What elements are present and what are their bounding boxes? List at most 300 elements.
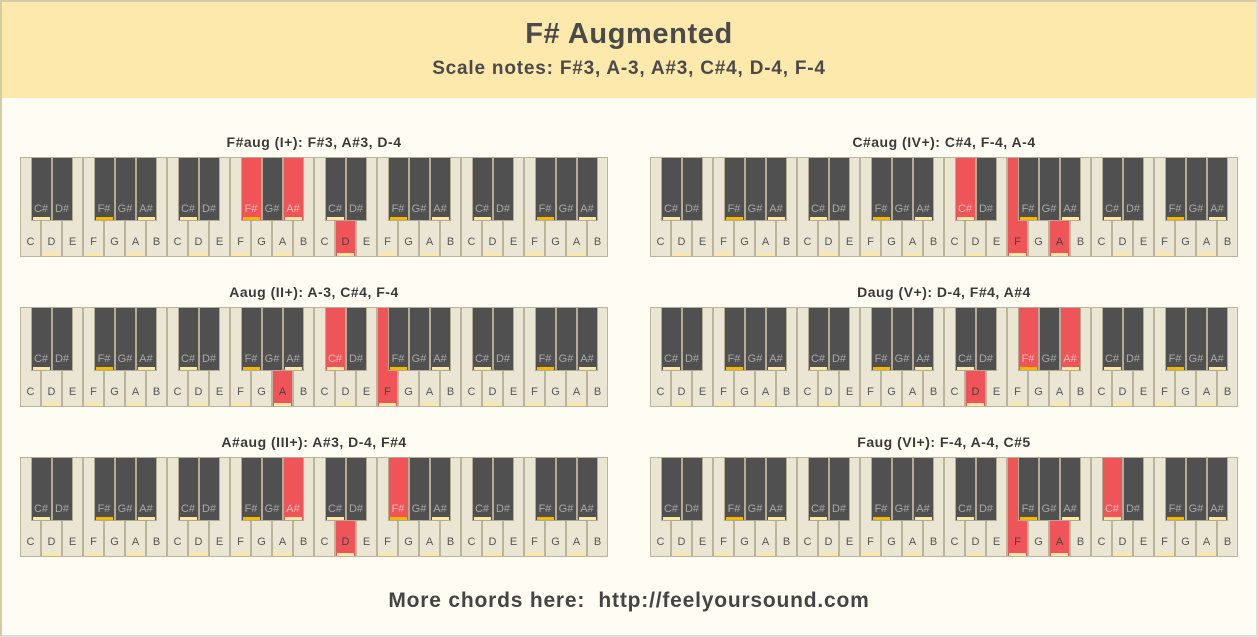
keyboard: Daug: D — [825, 386, 832, 398]
keyboard: C#aug: G — [740, 236, 749, 248]
keyboard: Aaug: G — [404, 386, 413, 398]
keyboard: Aaug: F — [237, 386, 244, 398]
keyboard: Faug: D# — [1126, 503, 1140, 515]
keyboard: Aaug: C — [321, 386, 328, 398]
keyboard: F#aug: F — [384, 236, 391, 248]
keyboard: Aaug: F# — [539, 353, 551, 365]
keyboard: F#aug: D# — [202, 203, 216, 215]
keyboard: C#aug: D# — [832, 203, 846, 215]
keyboard: F#aug: C# — [34, 203, 48, 215]
keyboard: Aaug: D# — [349, 353, 363, 365]
keyboard: Aaug: F# — [245, 353, 257, 365]
keyboard: C#aug: B — [1077, 236, 1084, 248]
chord title: F#aug: F#aug (I+): F#3, A#3, D-4 — [227, 134, 401, 150]
keyboard: F#aug: E — [216, 236, 223, 248]
keyboard: Daug: A — [1203, 386, 1210, 398]
keyboard: C#aug: C — [951, 236, 958, 248]
keyboard: Daug: G# — [1189, 353, 1203, 365]
keyboard: C#aug: A# — [1210, 203, 1224, 215]
keyboard: A#aug: A — [279, 536, 286, 548]
keyboard: A#aug: B — [153, 536, 160, 548]
keyboard: Daug: A# — [1210, 353, 1224, 365]
keyboard: A#aug: A# — [433, 503, 447, 515]
keyboard: C#aug: E — [1140, 236, 1147, 248]
keyboard: A#aug: A# — [580, 503, 594, 515]
keyboard: Aaug: D# — [496, 353, 510, 365]
keyboard: A#aug: G# — [559, 503, 573, 515]
keyboard: C#aug: A — [909, 236, 916, 248]
keyboard: F#aug: C — [321, 236, 328, 248]
keyboard: A#aug: C — [27, 536, 34, 548]
keyboard: Aaug: G# — [412, 353, 426, 365]
keyboard: Aaug: G# — [118, 353, 132, 365]
keyboard: F#aug: G — [404, 236, 413, 248]
keyboard: C#aug: F — [1161, 236, 1168, 248]
keyboard: C#aug: G# — [748, 203, 762, 215]
keyboard: F#aug: C — [27, 236, 34, 248]
keyboard: A#aug: E — [510, 536, 517, 548]
keyboard: Daug: G — [1034, 386, 1043, 398]
keyboard: F#aug: F — [90, 236, 97, 248]
keyboard: A#aug: G# — [412, 503, 426, 515]
keyboard: F#aug: F# — [392, 203, 404, 215]
keyboard: Faug: F# — [728, 503, 740, 515]
keyboard: A#aug: A# — [139, 503, 153, 515]
keyboard: Daug: F# — [1022, 353, 1034, 365]
keyboard: F#aug: D — [342, 236, 349, 248]
keyboard: C#aug: F — [867, 236, 874, 248]
keyboard: A#aug: E — [363, 536, 370, 548]
keyboard: Faug: F# — [1169, 503, 1181, 515]
keyboard: Faug: A — [1056, 536, 1063, 548]
keyboard: Faug: B — [1224, 536, 1231, 548]
keyboard: Aaug — [20, 307, 608, 407]
keyboard: Faug: A# — [1063, 503, 1077, 515]
keyboard: A#aug: B — [594, 536, 601, 548]
keyboard: Faug: G — [1181, 536, 1190, 548]
keyboard: Faug: F — [867, 536, 874, 548]
keyboard: Daug: C# — [1105, 353, 1119, 365]
keyboard: A#aug: E — [216, 536, 223, 548]
keyboard: A#aug — [20, 457, 608, 557]
keyboard: Daug: F# — [1169, 353, 1181, 365]
keyboard: Daug: C# — [958, 353, 972, 365]
keyboard: Aaug: C# — [328, 353, 342, 365]
keyboard: C#aug: C — [804, 236, 811, 248]
keyboard: A#aug: G# — [265, 503, 279, 515]
keyboard: A#aug: F# — [539, 503, 551, 515]
keyboard: Aaug: E — [216, 386, 223, 398]
keyboard: Faug: B — [1077, 536, 1084, 548]
keyboard: A#aug: D — [48, 536, 55, 548]
keyboard: A#aug: F# — [245, 503, 257, 515]
keyboard: Aaug: A# — [580, 353, 594, 365]
keyboard: F#aug: A# — [286, 203, 300, 215]
keyboard: Aaug: F# — [98, 353, 110, 365]
keyboard: Aaug: A — [426, 386, 433, 398]
keyboard: C#aug: F — [1014, 236, 1021, 248]
keyboard: A#aug: C — [174, 536, 181, 548]
keyboard: Faug: F# — [875, 503, 887, 515]
keyboard: C#aug: C# — [1105, 203, 1119, 215]
keyboard: Faug: C# — [811, 503, 825, 515]
keyboard: Aaug: B — [300, 386, 307, 398]
keyboard: C#aug: A — [762, 236, 769, 248]
keyboard: F#aug: G — [110, 236, 119, 248]
keyboard: Daug: C — [951, 386, 958, 398]
keyboard: Aaug: C# — [181, 353, 195, 365]
keyboard: Faug: E — [846, 536, 853, 548]
keyboard: Faug — [650, 457, 1238, 557]
keyboard: Aaug: D# — [202, 353, 216, 365]
keyboard: Daug: F — [720, 386, 727, 398]
keyboard: Aaug: C# — [34, 353, 48, 365]
keyboard: Faug: D — [972, 536, 979, 548]
keyboard: C#aug: A — [1203, 236, 1210, 248]
keyboard: F#aug: D# — [349, 203, 363, 215]
keyboard: A#aug: G — [404, 536, 413, 548]
keyboard: Aaug: E — [363, 386, 370, 398]
keyboard: A#aug: G — [257, 536, 266, 548]
keyboard: F#aug: G# — [412, 203, 426, 215]
keyboard: Daug: A# — [1063, 353, 1077, 365]
keyboard: Aaug: D# — [55, 353, 69, 365]
keyboard: A#aug: E — [69, 536, 76, 548]
keyboard: Aaug: B — [594, 386, 601, 398]
keyboard: F#aug: A — [279, 236, 286, 248]
keyboard: Daug: A# — [916, 353, 930, 365]
keyboard: A#aug: F — [531, 536, 538, 548]
keyboard: C#aug: C# — [958, 203, 972, 215]
keyboard: Faug: G# — [1189, 503, 1203, 515]
keyboard: Faug: D# — [685, 503, 699, 515]
keyboard: Faug: G# — [895, 503, 909, 515]
keyboard: A#aug: C — [468, 536, 475, 548]
keyboard: Faug: C — [1098, 536, 1105, 548]
keyboard: C#aug: D# — [1126, 203, 1140, 215]
keyboard: A#aug: A# — [286, 503, 300, 515]
keyboard: Faug: C# — [664, 503, 678, 515]
keyboard: Daug: D# — [979, 353, 993, 365]
keyboard: C#aug: G# — [1042, 203, 1056, 215]
keyboard: C#aug: E — [699, 236, 706, 248]
keyboard: Daug: G# — [895, 353, 909, 365]
keyboard: Aaug: F — [531, 386, 538, 398]
keyboard: A#aug: C — [321, 536, 328, 548]
keyboard: F#aug: B — [300, 236, 307, 248]
keyboard: Faug: G — [740, 536, 749, 548]
footer link text: More chords here: http://feelyoursound.com — [388, 589, 870, 612]
keyboard: F#aug: B — [153, 236, 160, 248]
keyboard: F#aug: B — [447, 236, 454, 248]
keyboard: C#aug: G — [1034, 236, 1043, 248]
keyboard: Faug: D — [825, 536, 832, 548]
keyboard: C#aug: A — [1056, 236, 1063, 248]
keyboard: F#aug: A# — [433, 203, 447, 215]
keyboard: Faug: A# — [769, 503, 783, 515]
keyboard: Aaug: B — [153, 386, 160, 398]
keyboard: Faug: E — [993, 536, 1000, 548]
keyboard: Daug: C — [804, 386, 811, 398]
keyboard: Faug: C — [951, 536, 958, 548]
keyboard: A#aug: D# — [496, 503, 510, 515]
keyboard: F#aug: A — [132, 236, 139, 248]
keyboard: Daug: A# — [769, 353, 783, 365]
keyboard: Faug: B — [930, 536, 937, 548]
keyboard: F#aug: C# — [181, 203, 195, 215]
keyboard: F#aug: D — [195, 236, 202, 248]
keyboard: Faug: D# — [832, 503, 846, 515]
keyboard: F#aug: D — [48, 236, 55, 248]
keyboard: Aaug: A — [279, 386, 286, 398]
keyboard: Aaug: G# — [559, 353, 573, 365]
keyboard: F#aug: D# — [55, 203, 69, 215]
keyboard: Aaug: G — [551, 386, 560, 398]
keyboard: Faug: G — [1034, 536, 1043, 548]
keyboard: Aaug: A — [132, 386, 139, 398]
keyboard: Faug: D — [1119, 536, 1126, 548]
keyboard: Daug: C# — [664, 353, 678, 365]
keyboard: A#aug: G — [551, 536, 560, 548]
keyboard: Daug: D — [972, 386, 979, 398]
keyboard: Aaug: D — [195, 386, 202, 398]
keyboard: F#aug: E — [69, 236, 76, 248]
keyboard: Daug: E — [1140, 386, 1147, 398]
keyboard: C#aug: G# — [895, 203, 909, 215]
subtitle: scale notes: Scale notes: F#3, A-3, A#3, C#4, D-4, F-4 — [432, 58, 826, 79]
keyboard: A#aug: A — [132, 536, 139, 548]
keyboard: Daug: B — [783, 386, 790, 398]
keyboard: F#aug: F — [531, 236, 538, 248]
keyboard: Faug: G — [887, 536, 896, 548]
chord title: C#aug: C#aug (IV+): C#4, F-4, A-4 — [852, 134, 1036, 150]
keyboard: Aaug: G — [257, 386, 266, 398]
keyboard: F#aug: G — [551, 236, 560, 248]
keyboard: Daug: F — [867, 386, 874, 398]
keyboard: Faug: B — [783, 536, 790, 548]
keyboard: Daug: G# — [748, 353, 762, 365]
keyboard: C#aug: A# — [916, 203, 930, 215]
keyboard: C#aug: C — [1098, 236, 1105, 248]
keyboard: F#aug: B — [594, 236, 601, 248]
keyboard: Daug: F — [1161, 386, 1168, 398]
keyboard: Faug: A# — [916, 503, 930, 515]
keyboard: Aaug: F — [384, 386, 391, 398]
keyboard: F#aug: A# — [580, 203, 594, 215]
keyboard: Daug: E — [993, 386, 1000, 398]
keyboard: Daug: B — [1077, 386, 1084, 398]
keyboard: C#aug: B — [783, 236, 790, 248]
keyboard: Faug: E — [1140, 536, 1147, 548]
keyboard: Faug: C — [804, 536, 811, 548]
keyboard: Daug: F — [1014, 386, 1021, 398]
keyboard: F#aug: F# — [539, 203, 551, 215]
keyboard: C#aug: E — [993, 236, 1000, 248]
keyboard: C#aug: D — [825, 236, 832, 248]
keyboard: Aaug: A# — [433, 353, 447, 365]
keyboard: Daug: B — [1224, 386, 1231, 398]
keyboard: Faug: A# — [1210, 503, 1224, 515]
header — [2, 2, 1256, 98]
keyboard: F#aug: F# — [98, 203, 110, 215]
keyboard: A#aug: F — [237, 536, 244, 548]
keyboard: C#aug: G — [1181, 236, 1190, 248]
keyboard: C#aug: D — [1119, 236, 1126, 248]
keyboard: C#aug: F# — [1022, 203, 1034, 215]
keyboard: F#aug: E — [510, 236, 517, 248]
keyboard: F#aug: C# — [328, 203, 342, 215]
keyboard: Daug: A — [1056, 386, 1063, 398]
keyboard: F#aug: C — [174, 236, 181, 248]
keyboard: Daug: D# — [685, 353, 699, 365]
keyboard: Daug: A — [909, 386, 916, 398]
keyboard: Aaug: C — [468, 386, 475, 398]
keyboard: F#aug: A — [573, 236, 580, 248]
keyboard: Aaug: E — [69, 386, 76, 398]
keyboard: A#aug: G — [110, 536, 119, 548]
keyboard: Aaug: D — [48, 386, 55, 398]
keyboard: C#aug: F — [720, 236, 727, 248]
keyboard: Aaug: C — [174, 386, 181, 398]
keyboard: C#aug: G — [887, 236, 896, 248]
keyboard: F#aug: A — [426, 236, 433, 248]
keyboard: Daug: G# — [1042, 353, 1056, 365]
keyboard: Faug: F — [1161, 536, 1168, 548]
keyboard: F#aug: D# — [496, 203, 510, 215]
keyboard: Faug: F — [1014, 536, 1021, 548]
keyboard: F#aug: G — [257, 236, 266, 248]
keyboard: A#aug: F — [384, 536, 391, 548]
keyboard: Daug — [650, 307, 1238, 407]
keyboard: Aaug: F — [90, 386, 97, 398]
keyboard: A#aug: A — [426, 536, 433, 548]
keyboard: Aaug: C# — [475, 353, 489, 365]
keyboard: A#aug: C# — [328, 503, 342, 515]
keyboard: Faug: F — [720, 536, 727, 548]
keyboard: Faug: A — [1203, 536, 1210, 548]
keyboard: Daug: C# — [811, 353, 825, 365]
keyboard: Daug: D — [678, 386, 685, 398]
keyboard: Faug: F# — [1022, 503, 1034, 515]
keyboard: Daug: B — [930, 386, 937, 398]
keyboard: F#aug: G# — [118, 203, 132, 215]
keyboard: A#aug: A — [573, 536, 580, 548]
keyboard: C#aug: A# — [769, 203, 783, 215]
keyboard: A#aug: D — [489, 536, 496, 548]
keyboard: A#aug: F# — [98, 503, 110, 515]
keyboard: Aaug: C — [27, 386, 34, 398]
keyboard: Daug: G — [1181, 386, 1190, 398]
keyboard: Daug: D# — [1126, 353, 1140, 365]
keyboard: A#aug: F# — [392, 503, 404, 515]
keyboard: Aaug: D — [342, 386, 349, 398]
title: F# Augmented — [525, 18, 733, 50]
keyboard: F#aug: F — [237, 236, 244, 248]
keyboard: Daug: F# — [875, 353, 887, 365]
keyboard: F#aug — [20, 157, 608, 257]
keyboard: Daug: D# — [832, 353, 846, 365]
keyboard: C#aug: A# — [1063, 203, 1077, 215]
keyboard: Daug: E — [846, 386, 853, 398]
keyboard: Faug: C# — [958, 503, 972, 515]
keyboard: Aaug: G — [110, 386, 119, 398]
keyboard: Aaug: D — [489, 386, 496, 398]
keyboard: A#aug: C# — [34, 503, 48, 515]
keyboard: Faug: D# — [979, 503, 993, 515]
keyboard: A#aug: D — [342, 536, 349, 548]
keyboard: C#aug: B — [1224, 236, 1231, 248]
keyboard: C#aug: E — [846, 236, 853, 248]
keyboard: Aaug: A# — [286, 353, 300, 365]
keyboard: A#aug: D# — [202, 503, 216, 515]
keyboard: A#aug: B — [300, 536, 307, 548]
keyboard: C#aug: G# — [1189, 203, 1203, 215]
keyboard: A#aug: F — [90, 536, 97, 548]
keyboard: F#aug: C — [468, 236, 475, 248]
keyboard: A#aug: G# — [118, 503, 132, 515]
keyboard: Aaug: G# — [265, 353, 279, 365]
keyboard: A#aug: D# — [349, 503, 363, 515]
keyboard: Faug: A — [909, 536, 916, 548]
keyboard: Faug: C — [657, 536, 664, 548]
keyboard: C#aug: D# — [685, 203, 699, 215]
keyboard: C#aug: C# — [664, 203, 678, 215]
keyboard: F#aug: G# — [559, 203, 573, 215]
keyboard: C#aug — [650, 157, 1238, 257]
keyboard: Faug: G# — [748, 503, 762, 515]
keyboard: Daug: C — [1098, 386, 1105, 398]
keyboard: A#aug: B — [447, 536, 454, 548]
chord title: Faug: Faug (VI+): F-4, A-4, C#5 — [857, 434, 1031, 450]
keyboard: C#aug: D — [678, 236, 685, 248]
chord title: Aaug: Aaug (II+): A-3, C#4, F-4 — [229, 284, 399, 300]
keyboard: C#aug: F# — [875, 203, 887, 215]
keyboard: A#aug: C# — [475, 503, 489, 515]
keyboard: C#aug: F# — [1169, 203, 1181, 215]
keyboard: C#aug: B — [930, 236, 937, 248]
keyboard: Aaug: A# — [139, 353, 153, 365]
keyboard: F#aug: D — [489, 236, 496, 248]
keyboard: A#aug: D# — [55, 503, 69, 515]
keyboard: F#aug: A# — [139, 203, 153, 215]
keyboard: Daug: G — [887, 386, 896, 398]
keyboard: C#aug: C# — [811, 203, 825, 215]
keyboard: A#aug: D — [195, 536, 202, 548]
keyboard: A#aug: C# — [181, 503, 195, 515]
keyboard: F#aug: G# — [265, 203, 279, 215]
keyboard: Faug: D — [678, 536, 685, 548]
keyboard: Daug: A — [762, 386, 769, 398]
keyboard: Daug: F# — [728, 353, 740, 365]
chord title: Daug: Daug (V+): D-4, F#4, A#4 — [857, 284, 1031, 300]
keyboard: C#aug: C — [657, 236, 664, 248]
keyboard: Faug: G# — [1042, 503, 1056, 515]
keyboard: Daug: G — [740, 386, 749, 398]
keyboard: F#aug: C# — [475, 203, 489, 215]
keyboard: Aaug: F# — [392, 353, 404, 365]
keyboard: Daug: D — [1119, 386, 1126, 398]
keyboard: Aaug: A — [573, 386, 580, 398]
keyboard: Faug: E — [699, 536, 706, 548]
keyboard: F#aug: E — [363, 236, 370, 248]
keyboard: Faug: A — [762, 536, 769, 548]
keyboard: Faug: C# — [1105, 503, 1119, 515]
keyboard: C#aug: D# — [979, 203, 993, 215]
keyboard: C#aug: D — [972, 236, 979, 248]
keyboard: Daug: C — [657, 386, 664, 398]
keyboard: Aaug: B — [447, 386, 454, 398]
keyboard: Aaug: E — [510, 386, 517, 398]
